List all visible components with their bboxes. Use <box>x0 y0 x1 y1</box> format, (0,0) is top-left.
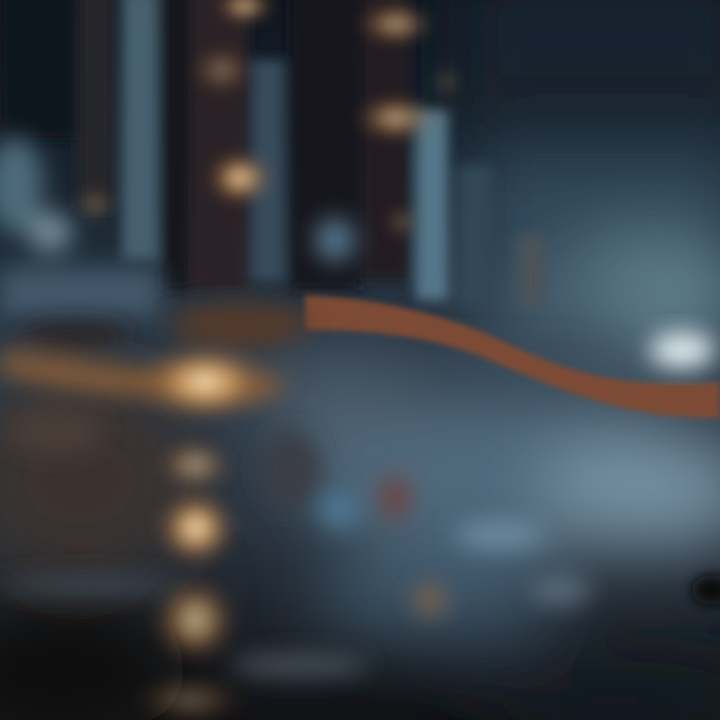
dark towers <box>0 0 544 305</box>
lower haze <box>0 360 720 720</box>
small lower details <box>0 406 590 677</box>
bright white light on right <box>650 332 714 368</box>
left amber band <box>0 303 310 398</box>
glowing central reflections <box>130 338 277 720</box>
glowing tower lights <box>71 0 464 242</box>
left haze clusters <box>0 137 355 318</box>
dark corner blot <box>692 575 720 605</box>
copper ribbon <box>305 295 720 418</box>
right sky haze <box>460 0 720 360</box>
